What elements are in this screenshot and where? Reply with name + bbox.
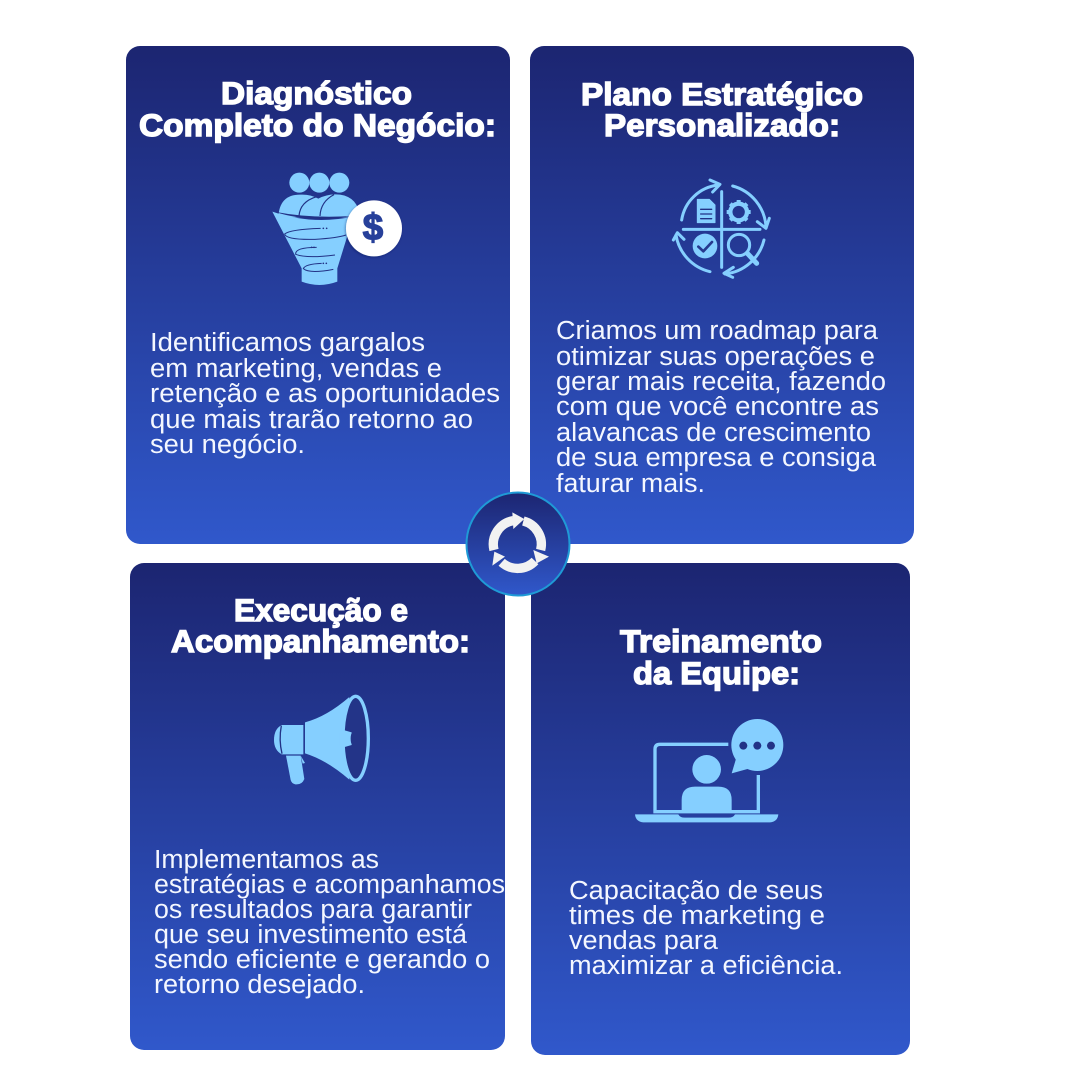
text: Treinamento description: vendas para [569,927,719,955]
text: Execução description: sendo eficiente e gerando o [154,946,490,974]
icon: funnel with people and dollar coin: $ [363,206,383,247]
icon: strategy cycle with four quadrants [673,180,769,277]
text: Diagnóstico description: que mais trarão retorno ao [150,406,473,434]
text: Plano Estratégico description: alavancas de crescimento [556,419,871,447]
heading: Execução e Acompanhamento: Execução e [234,592,408,628]
heading: Diagnóstico Completo do Negócio [139,75,496,143]
text: Diagnóstico description: seu negócio. [150,431,305,459]
heading: Plano Estratégico Personalizado: Personalizado: [604,107,840,143]
text: Execução description [154,846,505,999]
heading: Diagnóstico Completo do Negócio: Diagnóstico [221,75,412,111]
panel: Treinamento da Equipe [531,563,910,1055]
heading: Treinamento da Equipe [620,623,822,691]
text: Plano Estratégico description: de sua empresa e consiga [556,444,877,472]
heading: Execução e Acompanhamento [171,592,470,659]
text: Treinamento description: maximizar a eficiência. [569,952,843,980]
heading: Treinamento da Equipe: da Equipe: [633,655,800,691]
panel: Diagnóstico [126,46,510,544]
text: Plano Estratégico description [556,317,886,498]
heading: Diagnóstico Completo do Negócio: Completo do Negócio: [139,107,496,143]
text: Execução description: retorno desejado. [154,971,365,999]
heading: Plano Estratégico Personalizado [581,76,863,143]
text: Diagnóstico description: em marketing, vendas e [150,355,442,383]
text: Execução description: que seu investimento está [154,921,468,949]
center badge with cycle arrows [466,492,570,596]
heading: Plano Estratégico Personalizado: Plano Estratégico [581,76,863,112]
icon: megaphone [274,696,368,784]
text: Diagnóstico description: Identificamos gargalos [150,329,425,357]
text: Diagnóstico description [150,329,500,459]
icon: funnel with people and dollar coin [272,173,402,285]
text: Plano Estratégico description: com que você encontre as [556,393,879,421]
text: Diagnóstico description: retenção e as oportunidades [150,380,500,408]
text: Treinamento description: times de marketing e [569,902,825,930]
text: Treinamento description [569,877,843,980]
icon: cycle arrows [492,512,549,568]
text: Treinamento description: Capacitação de seus [569,877,823,905]
text: Execução description: estratégias e acompanhamos [154,871,505,899]
text: Plano Estratégico description: faturar mais. [556,470,705,498]
heading: Execução e Acompanhamento: Acompanhamento: [171,623,470,659]
panel: Execução e Acompanhamento [130,563,505,1050]
panel: Plano Estratégico [530,46,914,544]
text: Execução description: os resultados para garantir [154,896,473,924]
text: Plano Estratégico description: otimizar suas operações e [556,343,875,371]
icon: laptop with person and speech bubble [635,719,783,822]
text: Plano Estratégico description: gerar mais receita, fazendo [556,368,886,396]
text: Execução description: Implementamos as [154,846,379,874]
text: Plano Estratégico description: Criamos um roadmap para [556,317,879,345]
heading: Treinamento da Equipe: Treinamento [620,623,822,659]
